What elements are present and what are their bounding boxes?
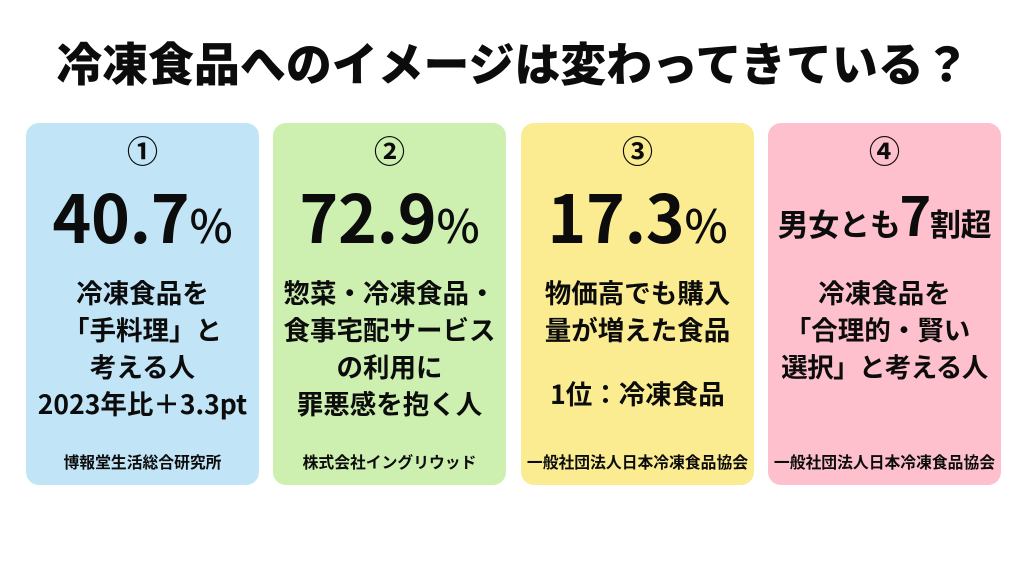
card 3 description: 物価高でも購入 (545, 272, 730, 311)
card 2 description: の利用に (336, 346, 442, 385)
panel: card 2 (273, 123, 506, 485)
card 4 description: 「合理的・賢い (785, 309, 970, 348)
card 1 source: 博報堂生活総合研究所 (64, 450, 221, 473)
card 3 source: 一般社団法人日本冷凍食品協会 (527, 450, 748, 473)
card 2 number badge: ② (374, 127, 405, 172)
card 3 headline stat: 17.3% (547, 167, 728, 263)
card 1 description: 冷凍食品を (76, 272, 209, 311)
card 3 description: 量が増えた食品 (545, 309, 730, 348)
title: 冷凍食品へのイメージは変わってきている？ (56, 29, 970, 95)
card 2 description (284, 272, 496, 422)
card 1 description: 考える人 (90, 346, 195, 385)
card 1 description: 2023年比＋3.3pt (38, 383, 247, 422)
panel: card 3 (521, 123, 754, 485)
panel: card 1 (26, 123, 259, 485)
card 2 description: 惣菜・冷凍食品・ (284, 272, 496, 311)
card 4 source: 一般社団法人日本冷凍食品協会 (774, 450, 995, 473)
card 3 description (545, 272, 730, 348)
card 1 description: 「手料理」と (63, 309, 222, 348)
card 4 description: 冷凍食品を (818, 272, 951, 311)
card 4 description (781, 272, 988, 385)
card 1 description (38, 272, 247, 422)
card 4 description: 選択」と考える人 (781, 346, 988, 385)
card 3 number badge: ③ (622, 127, 653, 172)
panel: card 4 (768, 123, 1001, 485)
card 1 number badge: ① (127, 127, 158, 172)
card 2 source: 株式会社イングリウッド (303, 450, 476, 473)
card 4 headline stat: 男女とも7割超 (778, 173, 991, 252)
card 2 description: 食事宅配サービス (284, 309, 496, 348)
card 2 headline stat: 72.9% (299, 167, 480, 263)
card 4 number badge: ④ (869, 127, 900, 172)
card 2 description: 罪悪感を抱く人 (297, 383, 482, 422)
card 3 ranking: 1位：冷凍食品 (550, 373, 725, 412)
card 1 headline stat: 40.7% (52, 167, 233, 263)
